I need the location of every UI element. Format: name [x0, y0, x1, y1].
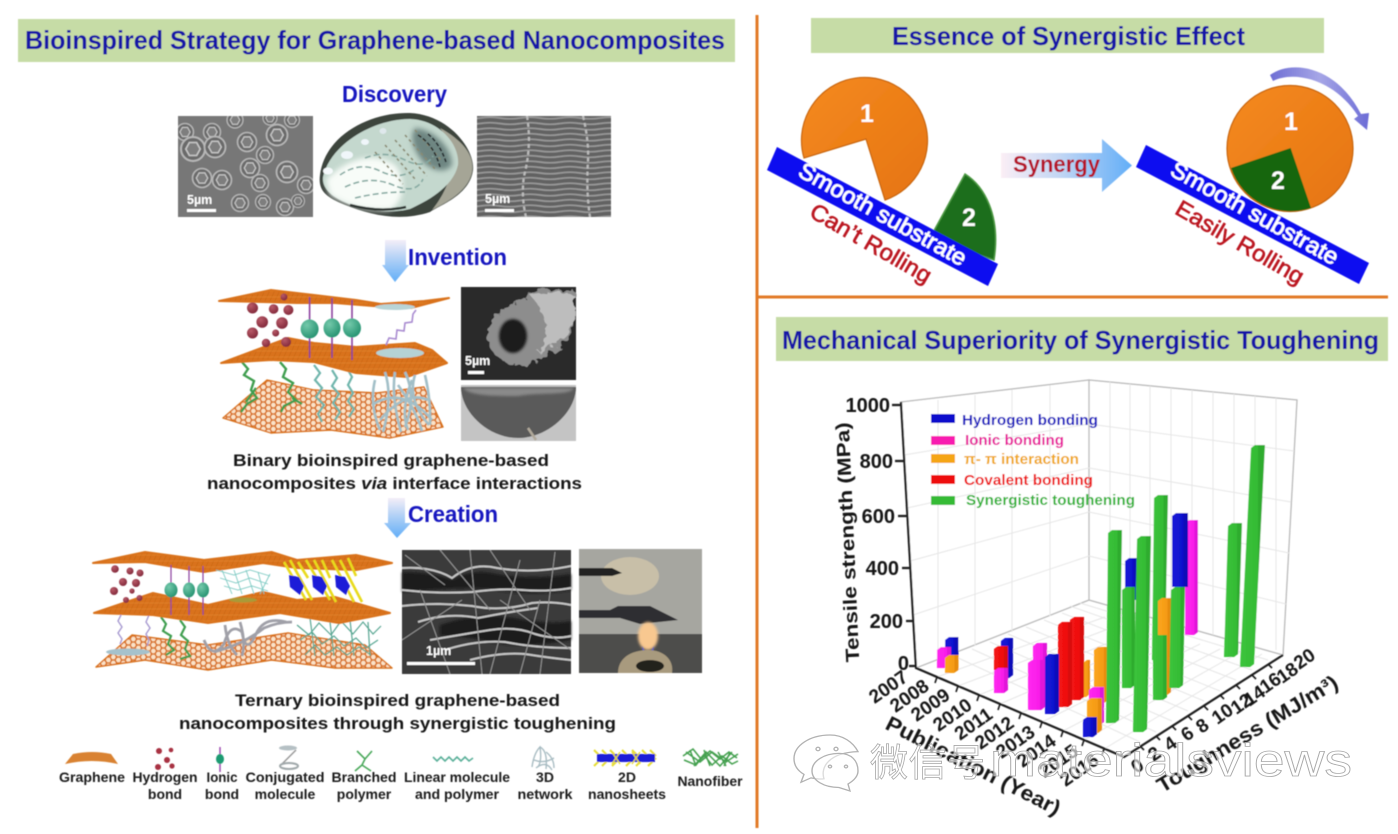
substrate: Smooth substrate	[794, 157, 971, 271]
panel: essence of synergistic effect	[767, 18, 1369, 289]
piece 1: orange pie with wedge cut out	[802, 77, 927, 200]
heading: invention: Invention	[408, 244, 507, 270]
image: ternary SEM: 1µm	[426, 644, 451, 658]
x axis title: Publication (Year)	[882, 712, 1064, 820]
legend item: conjugated molecule: molecule	[255, 786, 316, 802]
x axis year labels: 2009	[908, 685, 954, 726]
watermark text: WeChat ID: materialsviews	[990, 734, 1352, 786]
legend item: 2D nanosheets	[588, 750, 666, 802]
y axis labels: 400	[866, 558, 899, 580]
divider lines	[757, 15, 1388, 828]
legend item: 3D network	[518, 747, 573, 802]
legend item: conjugated molecule	[246, 746, 324, 802]
x axis year labels: 2016	[1057, 750, 1103, 791]
title: bioinspired strategy	[18, 19, 735, 62]
legend item: hydrogen bond: bond	[148, 786, 182, 802]
arrow: creation	[384, 498, 411, 538]
bars	[937, 445, 1265, 737]
y axis labels	[846, 395, 909, 675]
toughness tick labels: 2	[1144, 743, 1165, 766]
combined pie: 2	[1271, 167, 1285, 195]
y axis labels: 1000	[846, 395, 890, 417]
toughness tick labels: 0	[1127, 755, 1148, 778]
x axis year labels: 2012	[972, 713, 1018, 754]
chart legend: Synergistic toughening	[966, 492, 1135, 509]
image: SEM of nacre surface	[176, 111, 314, 217]
legend item: branched polymer: Branched	[332, 769, 396, 785]
chart legend	[931, 412, 1135, 509]
watermark text: WeChat ID: 微信号	[870, 743, 985, 785]
watermark text: WeChat ID	[870, 734, 1352, 786]
chart legend: Covalent bonding	[964, 472, 1093, 489]
title: essence	[811, 18, 1324, 53]
toughness tick labels: 6	[1177, 723, 1198, 746]
arrow: invention	[382, 240, 409, 282]
legend item: branched polymer	[332, 751, 396, 802]
image: fibre SEM: 5µm	[465, 354, 490, 368]
label: easily rolling: Easily Rolling	[1171, 195, 1309, 289]
legend item: ionic bond: Ionic	[206, 769, 238, 785]
caption: ternary: Ternary bioinspired graphene-based	[235, 691, 560, 710]
x axis year labels: 2008	[887, 676, 933, 717]
piece 1: orange pie with wedge cut out: 1	[860, 100, 874, 128]
toughness tick labels: 16	[1256, 669, 1286, 698]
chart legend: Hydrogen bonding	[962, 412, 1098, 429]
toughness tick labels: 14	[1240, 682, 1270, 711]
figure: easily rolling	[1136, 67, 1369, 289]
legend item: 2D nanosheets: nanosheets	[588, 786, 666, 802]
chart legend: π- π interaction	[964, 451, 1079, 468]
label: can't rolling: Can’t Rolling	[806, 198, 936, 288]
image: fibre SEM	[461, 287, 576, 380]
watermark: WeChat	[794, 734, 1352, 791]
toughness tick labels: 10	[1208, 700, 1238, 729]
legend item: ionic bond: bond	[205, 786, 239, 802]
image: flame test photo	[579, 549, 702, 673]
legend item: 2D nanosheets: 2D	[618, 769, 636, 785]
combined pie	[1227, 86, 1353, 212]
heading: creation: Creation	[408, 501, 498, 527]
toughness axis title: Toughness (MJ/m³)	[1153, 671, 1342, 798]
toughness tick labels: 8	[1192, 715, 1213, 738]
title: bioinspired strategy: Bioinspired Strategy for Graphene-based Nanocomposites	[25, 25, 725, 55]
image: SEM of nacre surface: 5µm	[187, 193, 212, 207]
piece 2: green sector: 2	[962, 204, 976, 232]
title: essence: Essence of Synergistic Effect	[892, 21, 1245, 51]
legend item: 3D network: network	[518, 786, 573, 802]
image: SEM of nacre cross-section: 5µm	[485, 192, 510, 206]
panel: bioinspired strategy	[18, 19, 743, 802]
figure: can't rolling	[767, 77, 998, 288]
substrate	[1136, 145, 1369, 284]
legend: components	[59, 746, 743, 802]
arrow: synergy: Synergy	[1013, 151, 1100, 177]
toughness tick labels: 12	[1227, 690, 1257, 719]
diagram: binary nanocomposite layers	[219, 290, 449, 438]
legend item: graphene	[59, 752, 125, 785]
toughness tick labels	[1127, 645, 1320, 778]
toughness tick labels: 18	[1273, 659, 1303, 688]
icon: WeChat bubbles	[794, 735, 858, 791]
substrate: Smooth substrate	[1166, 156, 1343, 270]
caption: binary	[207, 451, 582, 493]
image: fracture cross-section	[461, 385, 576, 441]
y axis labels: 200	[870, 611, 903, 633]
substrate	[767, 147, 998, 286]
chart: 3D bar chart	[833, 380, 1342, 820]
x axis year labels: 2011	[951, 704, 997, 745]
caption: ternary: nanocomposites through synergistic toughening	[179, 714, 616, 733]
legend item: hydrogen bond: Hydrogen	[132, 769, 198, 785]
diagram: ternary nanocomposite layers	[93, 552, 392, 670]
legend item: branched polymer: polymer	[337, 786, 392, 802]
x axis year labels: 2015	[1036, 741, 1083, 782]
legend item: 3D network: 3D	[536, 769, 554, 785]
x axis year labels: 2014	[1014, 731, 1061, 772]
y axis labels: 0	[898, 653, 909, 675]
legend item: linear molecule and polymer	[404, 757, 510, 802]
caption: binary: Binary bioinspired graphene-based	[233, 451, 549, 470]
title: mechanical superiority	[776, 317, 1388, 361]
legend item: linear molecule and polymer: Linear molecule	[404, 769, 510, 785]
toughness tick labels: 4	[1160, 733, 1182, 756]
axes	[892, 402, 1283, 757]
image: abalone shell	[320, 113, 473, 217]
chart legend: Ionic bonding	[965, 432, 1064, 449]
caption: binary: nanocomposites via interface interactions	[207, 474, 582, 493]
rotation arrow	[1270, 67, 1369, 130]
panel: mechanical superiority	[776, 317, 1388, 820]
x axis year labels: 2010	[930, 695, 976, 736]
y axis labels: 800	[860, 451, 893, 473]
image: ternary SEM	[402, 550, 571, 674]
caption: ternary	[179, 691, 616, 733]
heading: discovery: Discovery	[342, 81, 447, 107]
title: mechanical superiority: Mechanical Superiority of Synergistic Toughening	[782, 325, 1379, 355]
legend item: nanofiber: Nanofiber	[678, 773, 743, 789]
legend item: graphene: Graphene	[59, 769, 125, 785]
legend item: conjugated molecule: Conjugated	[246, 769, 324, 785]
arrow: synergy	[1001, 139, 1132, 192]
legend item: nanofiber	[678, 749, 743, 789]
y axis labels: 600	[862, 506, 895, 528]
combined pie: 1	[1284, 108, 1298, 136]
piece 2: green sector	[930, 174, 996, 260]
image: SEM of nacre cross-section	[477, 116, 611, 217]
legend item: linear molecule and polymer: and polymer	[415, 786, 500, 802]
toughness tick labels: 20	[1290, 645, 1320, 674]
x axis year labels	[866, 667, 1103, 791]
x axis year labels: 2007	[866, 667, 912, 708]
y axis title: Tensile strength (MPa)	[833, 422, 864, 663]
x axis year labels: 2013	[993, 722, 1039, 763]
legend item: hydrogen bond	[132, 748, 198, 802]
legend item: ionic bond	[205, 747, 239, 802]
